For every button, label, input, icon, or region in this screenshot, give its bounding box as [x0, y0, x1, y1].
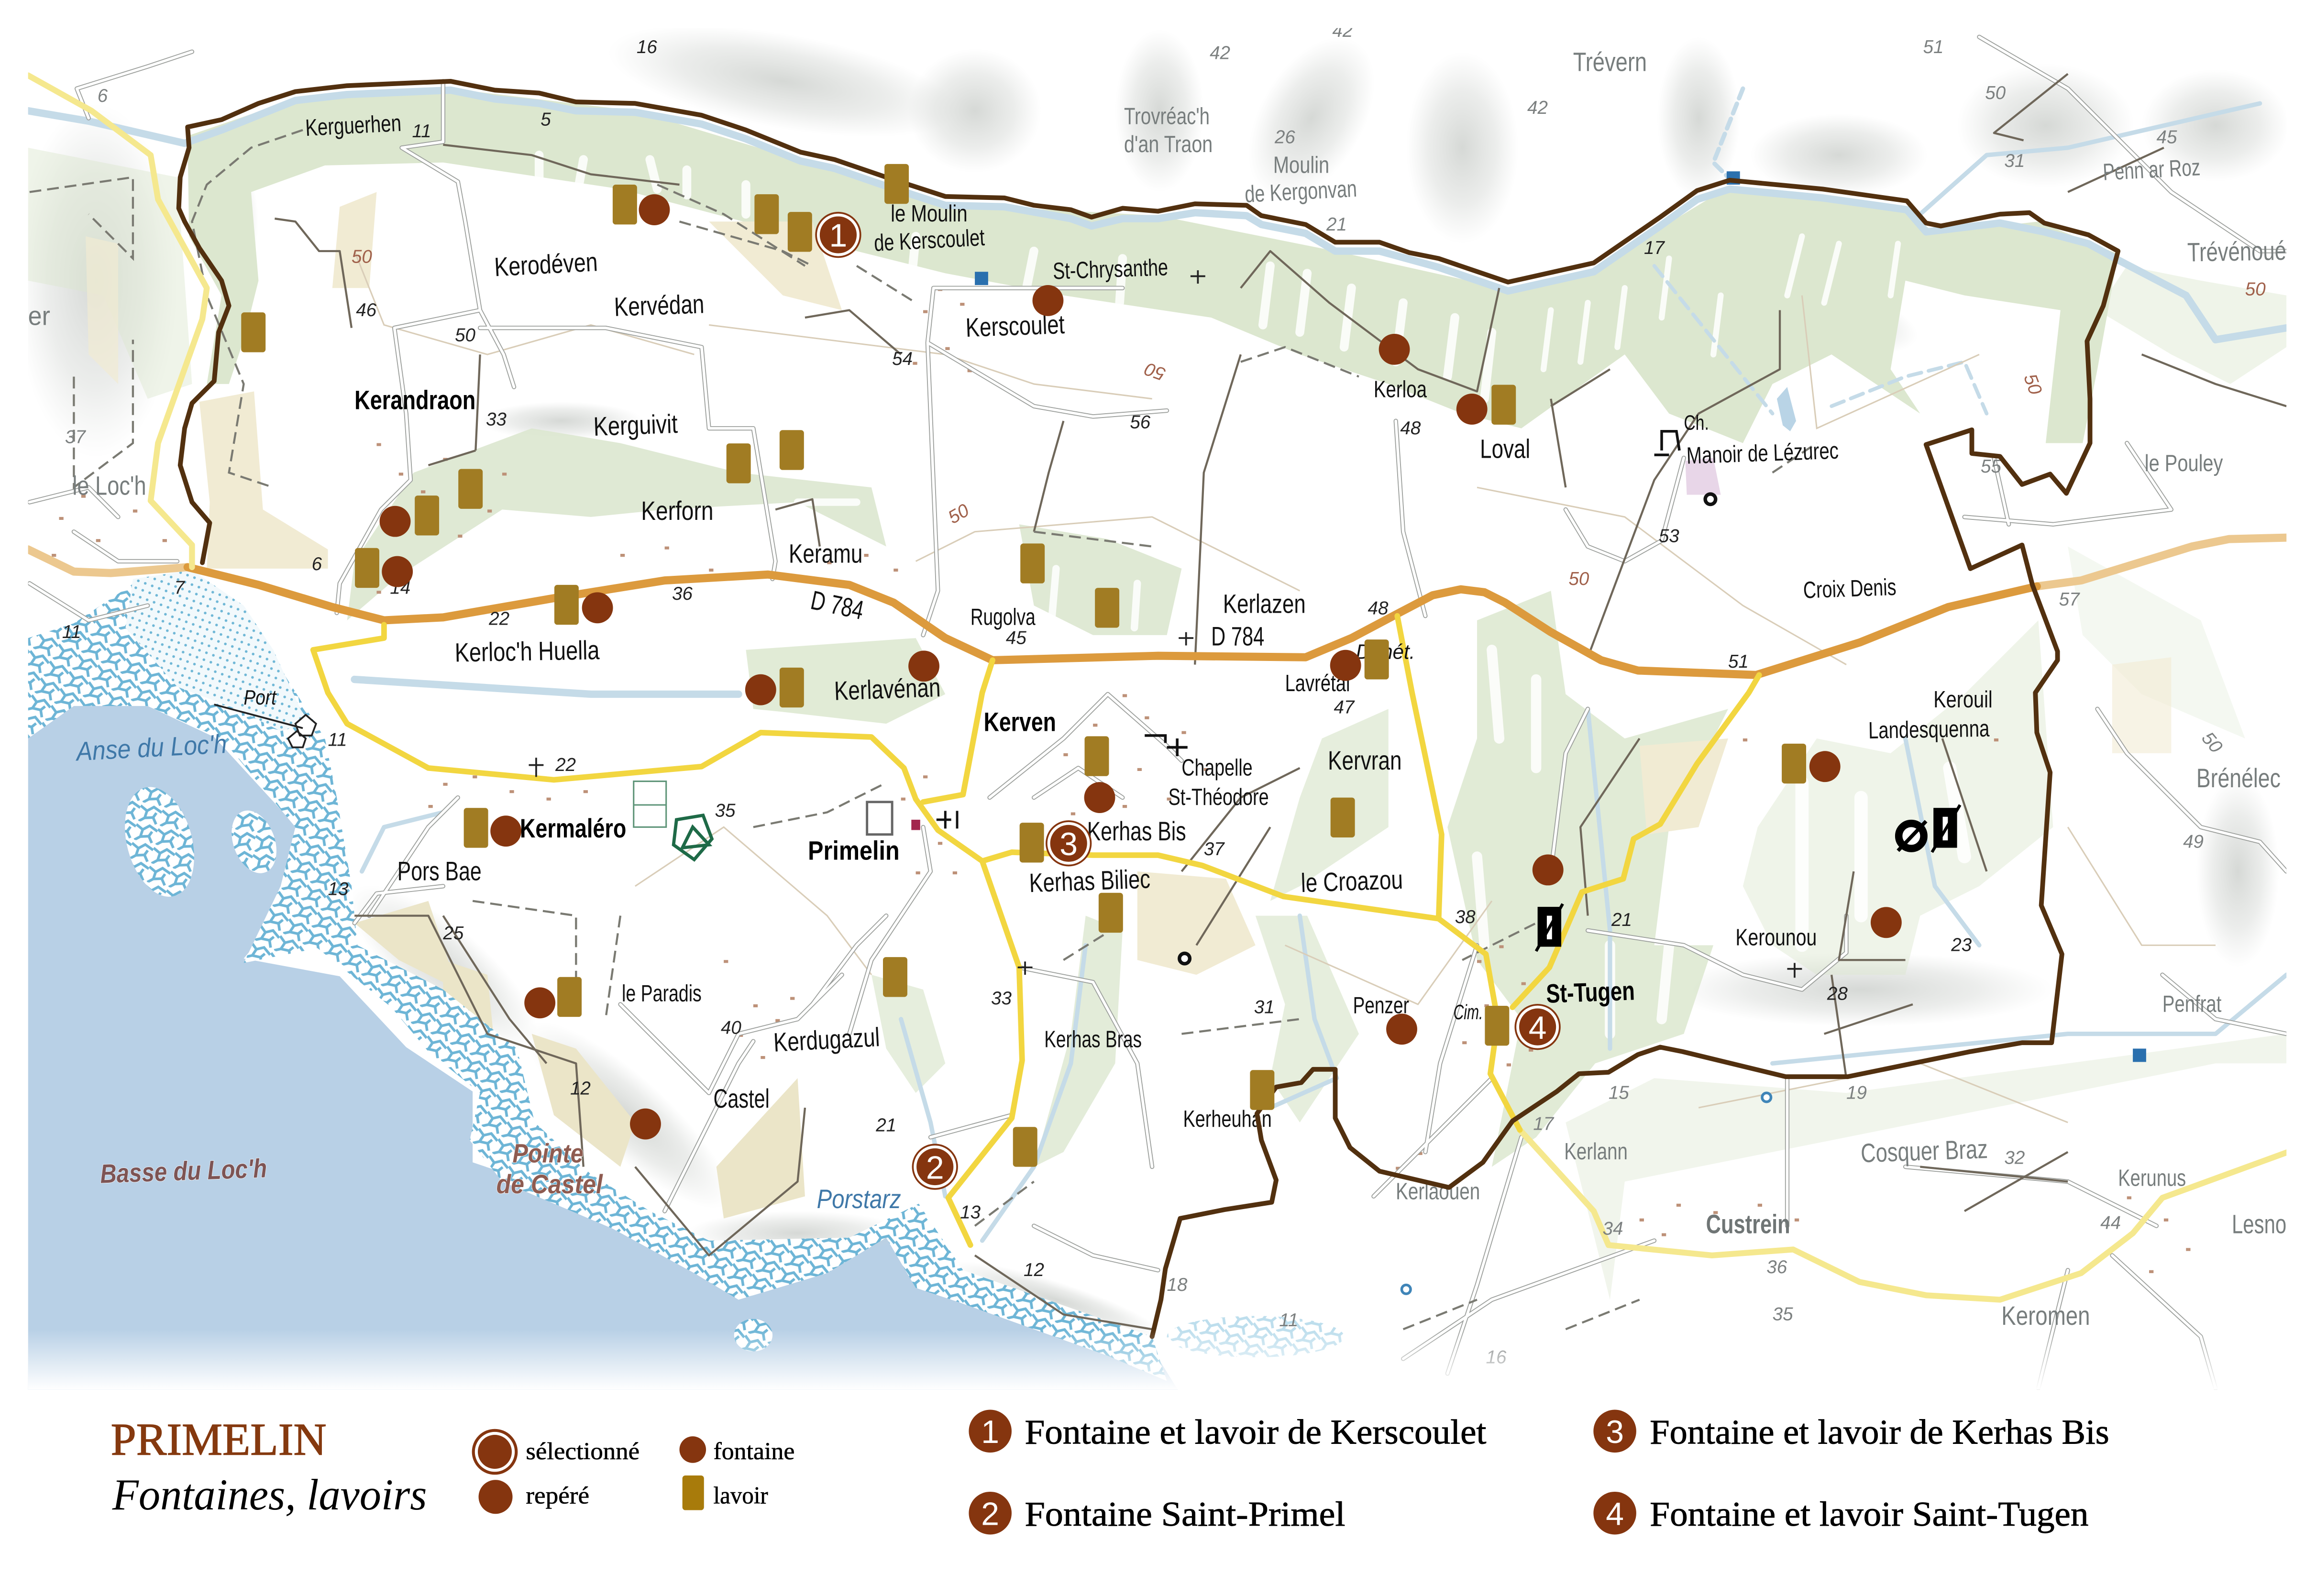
place labels: Kermaléro	[520, 814, 626, 843]
markers: fontaines	[380, 194, 1902, 1139]
sea and coast labels: de Castel	[496, 1169, 603, 1199]
place labels: Penn ar Roz	[2102, 154, 2201, 186]
spot heights: 53	[1659, 526, 1679, 546]
place labels: le Loc'h	[72, 471, 146, 501]
place labels: Chapelle	[1181, 754, 1253, 781]
contour lines	[354, 251, 2216, 1123]
place labels: de Kergonvan	[1244, 176, 1357, 208]
icon: chapel St-Théodore	[1145, 736, 1188, 756]
place labels: Kerloa	[1374, 376, 1427, 403]
legend: sélectionné	[474, 1431, 516, 1473]
icon: church Primelin	[937, 811, 957, 828]
legend: selected sites: 3	[1606, 1414, 1624, 1450]
legend: symbols	[474, 1431, 794, 1514]
spot heights: 28	[1827, 984, 1848, 1004]
place labels: le Moulin	[891, 200, 968, 227]
place labels: Kerunus	[2118, 1165, 2186, 1191]
selected marker 1: 1	[829, 218, 847, 254]
sea and coast labels: Pointe	[513, 1138, 584, 1168]
place labels: Pors Bae	[397, 857, 482, 886]
place labels: Trévénoué	[2187, 236, 2286, 267]
place labels: Custrein	[1706, 1210, 1790, 1239]
place labels: Kerlavénan	[834, 672, 941, 706]
place labels: Kerdugazul	[773, 1022, 881, 1057]
place labels: Keromen	[2001, 1301, 2090, 1331]
place labels: Kerforn	[641, 496, 714, 526]
spot heights: 33	[991, 988, 1012, 1009]
spot heights: 46	[356, 300, 377, 320]
sea and coast labels: Anse du Loc'h	[74, 729, 228, 766]
green vegetation patches	[28, 88, 2286, 1299]
place labels: D 784	[808, 585, 866, 625]
place labels: Rugolva	[971, 604, 1036, 630]
selected marker 4: 4	[1529, 1010, 1547, 1046]
pond	[1777, 387, 1796, 431]
place labels: Kerodéven	[494, 247, 598, 282]
white clearings in green strips	[539, 155, 1964, 1034]
place labels: er	[28, 301, 50, 330]
spot heights: 11	[62, 622, 81, 642]
sea and coast labels	[74, 729, 901, 1214]
place labels: Kerheuhan	[1183, 1106, 1272, 1132]
selected marker 3: 3	[1059, 826, 1078, 862]
rivers	[28, 88, 2286, 1241]
title	[111, 1414, 427, 1519]
place labels: Kerouil	[1933, 686, 1993, 713]
place labels: Kerhas Biliec	[1029, 864, 1151, 898]
spot heights: 37	[65, 427, 86, 447]
place labels: Penzer	[1353, 992, 1409, 1018]
spot heights: 17	[1533, 1113, 1555, 1134]
sea	[28, 702, 1181, 1396]
place labels: Port	[244, 686, 277, 709]
spot heights: 14	[390, 577, 410, 598]
icon: crosses	[529, 270, 1802, 978]
spot heights: 17	[1644, 238, 1665, 258]
legend: symbols: lavoir	[714, 1483, 768, 1509]
spot heights: 50	[352, 247, 372, 267]
place labels	[28, 47, 2286, 1331]
legend: selected sites: Fontaine et lavoir de Kerscoulet	[1025, 1413, 1486, 1452]
icon: crossed black symbol St-Tugen	[1536, 904, 1563, 951]
spot heights: 50	[2197, 728, 2227, 757]
spot heights: 36	[1766, 1257, 1787, 1277]
selected marker 3	[1047, 821, 1091, 866]
spot heights: 37	[1204, 839, 1225, 859]
yellow roads	[313, 616, 1759, 1245]
spot heights: 13	[960, 1202, 981, 1223]
spot heights: 42	[1210, 43, 1230, 64]
place labels: Cosquer Braz	[1860, 1134, 1988, 1168]
selected marker 2	[913, 1145, 957, 1189]
spot heights: 18	[1167, 1275, 1188, 1295]
legend: selected sites	[969, 1410, 2109, 1534]
place labels: le Paradis	[622, 980, 702, 1007]
spot heights: 16	[1486, 1347, 1507, 1367]
heading: PRIMELIN: PRIMELIN	[111, 1414, 326, 1465]
place labels: Keramu	[789, 539, 862, 569]
spot heights: 6	[98, 86, 108, 106]
spot heights: 34	[1602, 1219, 1623, 1239]
place labels: Kervédan	[614, 289, 705, 322]
legend: selected sites: Fontaine et lavoir de Kerhas Bis	[1650, 1413, 2109, 1452]
legend: selected sites: Fontaine Saint-Primel	[1025, 1495, 1345, 1533]
mudflat texture	[125, 570, 307, 731]
sea and coast labels: Porstarz	[817, 1184, 901, 1214]
villages	[52, 288, 2205, 1273]
site 3	[1593, 1410, 1636, 1453]
selected marker 2: 2	[926, 1150, 944, 1186]
rocky coast texture	[28, 579, 1167, 1381]
spot heights: 32	[2004, 1147, 2025, 1168]
islets	[114, 779, 1344, 1357]
place labels: Kerandraon	[354, 385, 475, 415]
legend: selected sites: 2	[981, 1496, 999, 1532]
place labels: d'an Traon	[1124, 131, 1213, 157]
legend: selected sites: 1	[981, 1414, 999, 1450]
spot heights: 11	[1279, 1310, 1298, 1331]
place labels: St-Tugen	[1545, 976, 1635, 1009]
site 2	[969, 1492, 1012, 1534]
spot heights: 51	[1923, 37, 1944, 57]
place labels: St-Chrysanthe	[1052, 254, 1169, 285]
sea and coast labels: Basse du Loc'h	[99, 1153, 267, 1189]
place labels: Kerlaouen	[1396, 1178, 1480, 1205]
spot heights: 7	[174, 577, 185, 598]
spot heights: 19	[1846, 1083, 1867, 1103]
place labels: Kerounou	[1735, 924, 1817, 950]
spot heights: 31	[1254, 997, 1275, 1017]
place labels: Trévern	[1573, 47, 1647, 77]
markers: lavoirs	[241, 164, 1806, 1167]
pale yellow roads	[28, 76, 2288, 1299]
place labels: Kerlann	[1564, 1138, 1628, 1165]
icon: chapel and manoir	[1654, 431, 1679, 455]
site 4	[1593, 1492, 1636, 1534]
place labels: Penfrat	[2162, 991, 2222, 1017]
spot heights: 11	[412, 121, 431, 142]
spot heights: 51	[1728, 651, 1749, 672]
selected marker 4	[1515, 1005, 1560, 1049]
place labels: Castel	[714, 1084, 770, 1113]
icon: blue squares	[975, 171, 2146, 1062]
icon: campsite	[673, 815, 712, 859]
spot heights: 57	[2059, 589, 2080, 610]
spot heights: 48	[1368, 598, 1389, 619]
spot heights: 25	[442, 923, 464, 944]
spot heights: 31	[2004, 151, 2025, 171]
place labels: Kerven	[984, 707, 1056, 737]
spot heights: 42	[1332, 21, 1353, 41]
icon: crossed black symbols Kerouil	[1898, 805, 1960, 852]
icon: blue circles	[1402, 1093, 1771, 1294]
place labels: Kerguerhen	[305, 110, 402, 141]
spot heights: 38	[1455, 907, 1476, 927]
spot heights: 35	[715, 801, 736, 821]
spot heights: 49	[2183, 832, 2204, 852]
spot heights: 47	[1334, 697, 1355, 718]
icon: black dots	[1180, 494, 1716, 964]
legend: repéré	[479, 1480, 513, 1514]
legend: symbols: fontaine	[714, 1438, 794, 1465]
spot heights: 50	[945, 500, 973, 528]
place labels: Lavrétal	[1285, 670, 1350, 696]
spot heights: 21	[875, 1115, 896, 1135]
spot heights: 15	[1609, 1083, 1629, 1103]
legend: symbols: repéré	[526, 1483, 589, 1509]
spot heights: 36	[672, 583, 693, 604]
spot heights: 50	[1985, 83, 2006, 103]
place labels: Landesquenna	[1868, 715, 1990, 744]
place labels: Kerhas Bras	[1044, 1026, 1142, 1052]
spot heights: 11	[328, 729, 347, 750]
place labels: le Croazou	[1301, 865, 1403, 898]
place labels: Trovréac'h	[1124, 103, 1210, 129]
spot heights: 48	[1400, 418, 1421, 439]
spot heights: 21	[1326, 214, 1347, 235]
main road D 784	[187, 567, 2037, 675]
subheading: Fontaines, lavoirs: Fontaines, lavoirs	[112, 1470, 427, 1519]
spot heights: 50	[2245, 279, 2266, 300]
spot heights: 54	[892, 349, 913, 369]
legend: symbols: sélectionné	[526, 1438, 640, 1465]
place labels: Primelin	[808, 836, 900, 865]
spot heights: 50	[455, 325, 476, 345]
icon: Primelin building	[867, 802, 892, 835]
spot heights: 5	[540, 110, 551, 130]
spot heights: 26	[1274, 127, 1295, 148]
spot heights: 6	[312, 554, 322, 574]
spot heights: 12	[570, 1078, 591, 1099]
spot heights: 21	[1611, 910, 1632, 930]
place labels: le Pouley	[2145, 450, 2223, 476]
place labels: Ch.	[1684, 412, 1709, 435]
icon: sports ground	[634, 781, 666, 827]
spot heights: 50	[2019, 371, 2046, 397]
spot heights: 55	[1981, 456, 2001, 477]
spot heights: 56	[1130, 412, 1151, 433]
place labels: Croix Denis	[1803, 574, 1897, 604]
selected marker 1	[816, 213, 860, 257]
spot heights: 22	[488, 608, 509, 629]
beige crop patches	[86, 192, 2171, 1219]
place labels: de Kerscoulet	[873, 224, 985, 256]
spot heights: 33	[486, 409, 507, 429]
tracks	[275, 74, 2286, 1329]
bottom fade of map	[28, 1329, 2286, 1390]
spot heights: 44	[2100, 1212, 2121, 1233]
icon: mairie square	[911, 820, 920, 830]
boundary of the commune	[179, 81, 2118, 1337]
place labels: Lesno	[2232, 1210, 2286, 1239]
place labels: Kerhas Bis	[1087, 816, 1186, 846]
spot heights: 45	[2156, 127, 2177, 148]
place labels: Kerloc'h Huella	[454, 635, 600, 667]
spot heights: 13	[328, 879, 349, 899]
legend: selected sites: 4	[1606, 1496, 1624, 1532]
spot heights: 50	[1142, 358, 1169, 385]
place labels: Brénélec	[2196, 763, 2281, 793]
place labels: St-Théodore	[1169, 784, 1269, 810]
dashed footpaths	[30, 130, 1817, 1329]
icon: manor purple area	[1685, 458, 1721, 495]
place labels: Kervran	[1328, 746, 1402, 775]
place labels: Kerscoulet	[965, 309, 1065, 342]
legend: selected sites: Fontaine et lavoir Saint-Tugen	[1650, 1495, 2088, 1533]
spot heights: 23	[1951, 935, 1972, 956]
place labels: Loval	[1480, 434, 1530, 463]
legend: fontaine	[679, 1436, 706, 1463]
place labels: Moulin	[1273, 152, 1329, 178]
place labels: Cim.	[1454, 1001, 1483, 1024]
main road D 784 faded extensions	[28, 538, 2286, 586]
place labels: Kerguivit	[593, 409, 678, 441]
spot heights: 22	[555, 755, 576, 775]
map symbols	[214, 171, 2146, 1294]
spot heights: 50	[1568, 569, 1589, 589]
place labels: Kerlazen	[1223, 589, 1306, 619]
legend: lavoir	[683, 1475, 704, 1510]
spot heights: 35	[1773, 1304, 1793, 1325]
place labels: Déhét.	[1356, 640, 1415, 663]
spot heights: 45	[1006, 627, 1026, 648]
place labels: Manoir de Lézurec	[1686, 438, 1839, 469]
spot heights: 16	[637, 37, 657, 57]
spot heights: 42	[1527, 98, 1548, 118]
icon: port stars	[214, 704, 316, 748]
spot heights: 12	[1024, 1260, 1044, 1280]
place labels: D 784	[1211, 622, 1264, 651]
site 1	[969, 1410, 1012, 1453]
spot heights: 40	[721, 1018, 741, 1038]
